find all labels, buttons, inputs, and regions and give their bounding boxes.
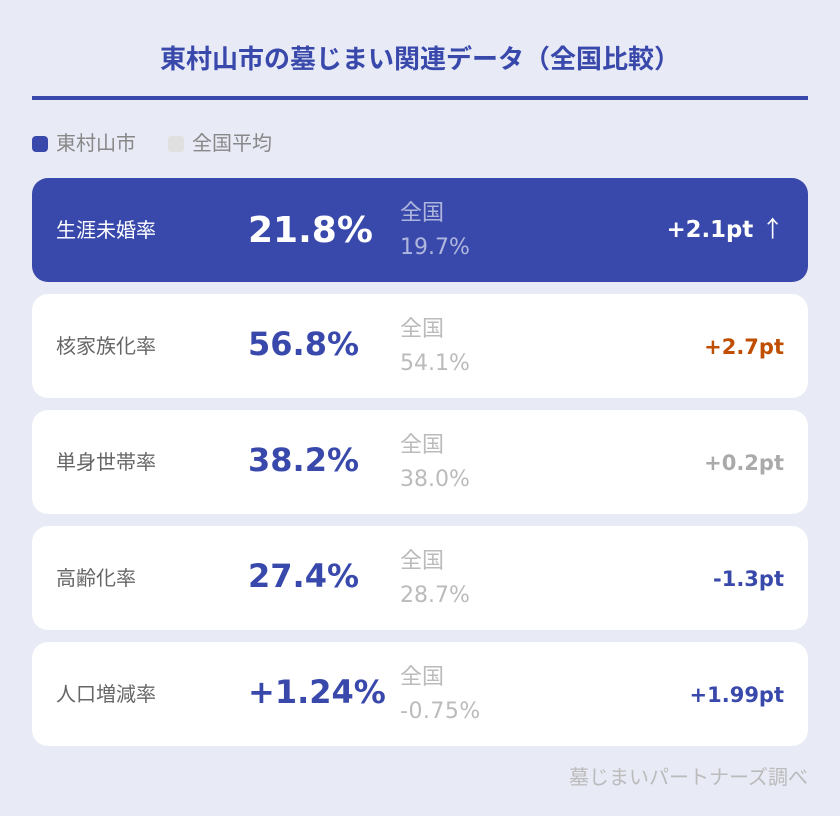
national comparison — [400, 433, 470, 492]
national comparison: 全国 — [400, 665, 444, 690]
panel: 高齢化率 — [32, 526, 808, 630]
difference: +2.7pt — [704, 335, 784, 359]
value: 56.8% — [248, 325, 359, 363]
difference: +2.1pt ↑ — [667, 211, 784, 244]
title rule — [32, 96, 808, 100]
label: 生涯未婚率 — [56, 218, 156, 242]
title: 東村山市の墓じまい関連データ（全国比較） — [160, 45, 680, 75]
label: 人口増減率 — [56, 682, 156, 706]
national comparison — [400, 549, 470, 608]
national comparison: 19.7% — [400, 235, 470, 260]
value: +1.24% — [248, 673, 386, 711]
national comparison — [400, 665, 481, 724]
national comparison: -0.75% — [400, 699, 481, 724]
legend — [32, 131, 272, 155]
panel: 人口増減率 — [32, 642, 808, 746]
label: 単身世帯率 — [56, 450, 156, 474]
difference: -1.3pt — [713, 567, 784, 591]
value: 21.8% — [248, 210, 373, 251]
national comparison: 54.1% — [400, 351, 470, 376]
difference: +1.99pt — [690, 683, 784, 707]
source note: 墓じまいパートナーズ調べ — [569, 765, 808, 789]
national comparison: 28.7% — [400, 583, 470, 608]
panel: 単身世帯率 — [32, 410, 808, 514]
legend label: 東村山市: 東村山市 — [56, 131, 136, 155]
legend swatch: 全国平均 — [168, 136, 184, 152]
national comparison: 全国 — [400, 201, 444, 226]
label: 高齢化率 — [56, 566, 136, 590]
national comparison — [400, 317, 470, 376]
legend swatch: 東村山市 — [32, 136, 48, 152]
legend label: 全国平均: 全国平均 — [192, 131, 272, 155]
panel: 核家族化率 — [32, 294, 808, 398]
national comparison — [400, 201, 470, 260]
national comparison: 全国 — [400, 317, 444, 342]
national comparison: 全国 — [400, 549, 444, 574]
national comparison: 全国 — [400, 433, 444, 458]
panel: 生涯未婚率 — [32, 178, 808, 282]
national comparison: 38.0% — [400, 467, 470, 492]
difference: +0.2pt — [704, 451, 784, 475]
label: 核家族化率 — [56, 334, 156, 358]
value: 27.4% — [248, 557, 359, 595]
value: 38.2% — [248, 441, 359, 479]
